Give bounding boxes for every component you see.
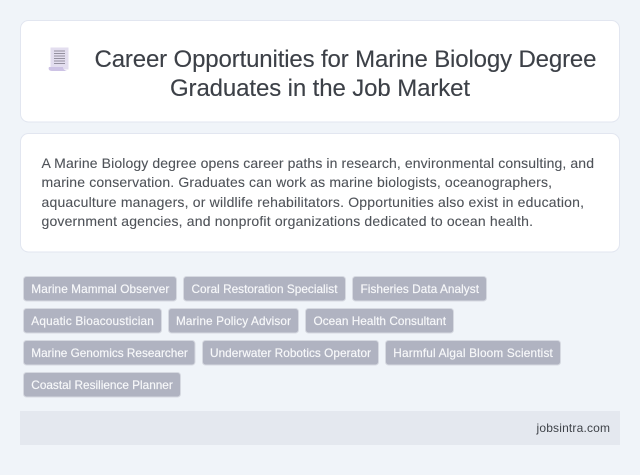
- tag: Marine Genomics Researcher: [31, 346, 188, 360]
- tag: Marine Mammal Observer: [31, 282, 169, 296]
- panel: header: [20, 20, 620, 122]
- tag: [352, 276, 486, 301]
- tag: Coral Restoration Specialist: [192, 282, 338, 296]
- description text: aquaculture managers, or wildlife rehabilitators. Opportunities also exist in education,: [42, 194, 584, 210]
- tag: Aquatic Bioacoustician: [31, 314, 154, 328]
- tag: Underwater Robotics Operator: [210, 346, 371, 360]
- tag list: [24, 276, 560, 397]
- tag: [386, 340, 560, 365]
- footer source text: jobsintra.com: [536, 421, 610, 435]
- title: [94, 46, 596, 102]
- tag: Coastal Resilience Planner: [31, 378, 173, 392]
- tag: [184, 276, 346, 301]
- tag: [24, 372, 180, 397]
- description text: A Marine Biology degree opens career paths in research, environmental consulting, and: [42, 155, 594, 171]
- panel: description: [20, 134, 620, 252]
- tag: Ocean Health Consultant: [314, 314, 447, 328]
- description text: marine conservation. Graduates can work as marine biologists, oceanographers,: [42, 174, 552, 190]
- title: Graduates in the Job Market: [170, 75, 470, 102]
- tag: [24, 276, 176, 301]
- tag: [24, 340, 195, 365]
- icon: document scroll: [49, 48, 68, 71]
- description text: government agencies, and nonprofit organizations dedicated to ocean health.: [42, 213, 533, 229]
- tag: [168, 308, 298, 333]
- title: Career Opportunities for Marine Biology Degree: [94, 46, 596, 73]
- footer bar: [20, 411, 620, 445]
- description text: [42, 155, 594, 229]
- tag: [24, 308, 162, 333]
- tag: Fisheries Data Analyst: [360, 282, 480, 296]
- tag: [306, 308, 454, 333]
- tag: Harmful Algal Bloom Scientist: [393, 346, 554, 360]
- tag: Marine Policy Advisor: [176, 314, 291, 328]
- tag: [202, 340, 378, 365]
